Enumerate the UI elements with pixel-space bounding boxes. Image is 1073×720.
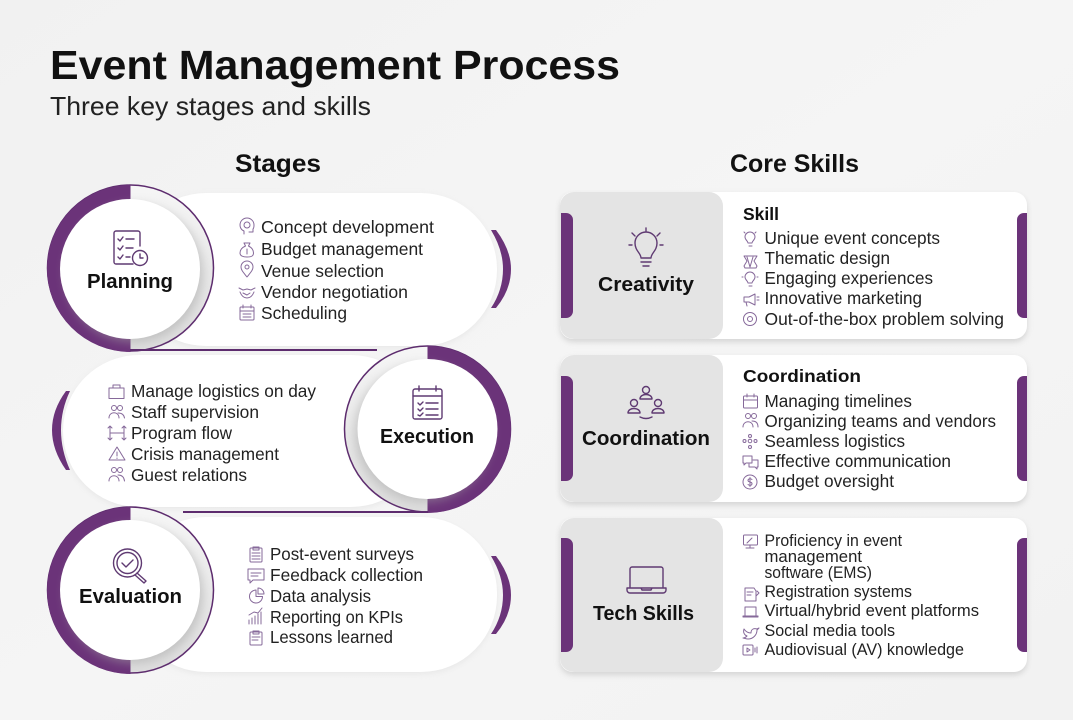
- panel: execution stage: [47, 192, 1027, 675]
- list: execution tasks: Staff supervision: [131, 402, 259, 422]
- list: tech skills items: software (EMS): [764, 564, 872, 582]
- list: evaluation tasks: [248, 544, 423, 647]
- list: planning tasks: Venue selection: [261, 261, 384, 281]
- accent bars: [561, 213, 1027, 318]
- icon: checklist with clock: [114, 231, 148, 266]
- icon: magnifier with check: [114, 549, 146, 583]
- list: evaluation tasks: Post-event surveys: [270, 544, 414, 564]
- list: execution tasks: Crisis management: [131, 444, 279, 464]
- list: execution tasks: [108, 381, 316, 485]
- accent arc: [52, 391, 70, 470]
- list: planning tasks: Budget management: [261, 239, 423, 259]
- label: evaluation: Evaluation: [79, 585, 182, 608]
- list: tech skills items: Social media tools: [764, 622, 895, 640]
- list: evaluation tasks: Lessons learned: [270, 627, 393, 647]
- icon: light bulb: [629, 228, 663, 266]
- title: Event Management Process: [50, 42, 620, 88]
- heading: stages: Stages: [235, 150, 321, 178]
- list: creativity skills: Skill: [743, 204, 779, 224]
- list: planning tasks: Vendor negotiation: [261, 282, 408, 302]
- list: coordination skills: Budget oversight: [764, 471, 894, 491]
- accent arc: [491, 230, 511, 308]
- panel: coordination skill card: [560, 355, 1027, 675]
- accent bars: [561, 538, 1027, 652]
- list: creativity skills: Unique event concepts: [764, 228, 940, 248]
- list: execution tasks: Guest relations: [131, 465, 247, 485]
- list: creativity skills: Thematic design: [764, 248, 890, 268]
- label: coordination: Coordination: [582, 427, 710, 450]
- list: creativity skills: [742, 204, 1004, 329]
- list: planning tasks: Scheduling: [261, 303, 347, 323]
- list: evaluation tasks: Data analysis: [270, 586, 371, 606]
- panel: planning stage: [47, 185, 1027, 675]
- icon: laptop: [627, 567, 666, 593]
- list: creativity skills: Innovative marketing: [764, 288, 922, 308]
- list: tech skills items: Virtual/hybrid event platforms: [764, 602, 979, 620]
- label: execution: Execution: [380, 425, 474, 448]
- icon: team circle: [628, 386, 664, 418]
- list: coordination skills: [743, 366, 996, 491]
- list: execution tasks: Program flow: [131, 423, 232, 443]
- list: creativity skills: Out-of-the-box problem solving: [764, 309, 1004, 329]
- label: creativity: Creativity: [598, 273, 695, 296]
- connector line: [130, 349, 377, 351]
- list: planning tasks: Concept development: [261, 217, 434, 237]
- label: planning: Planning: [87, 270, 173, 293]
- panel: evaluation stage: [47, 192, 1027, 675]
- list: tech skills items: Audiovisual (AV) knowledge: [764, 641, 964, 659]
- list: coordination skills: Organizing teams and vendors: [764, 411, 996, 431]
- list: tech skills items: management: [764, 548, 862, 566]
- list: coordination skills: Seamless logistics: [764, 431, 905, 451]
- list: tech skills items: Proficiency in event: [764, 532, 902, 550]
- accent bars: [561, 376, 1027, 481]
- connector line: [183, 511, 428, 513]
- label: tech skills: Tech Skills: [593, 602, 694, 625]
- list: tech skills items: [743, 532, 979, 659]
- list: coordination skills: Managing timelines: [764, 391, 912, 411]
- list: evaluation tasks: Feedback collection: [270, 565, 423, 585]
- list: coordination skills: Coordination: [743, 366, 861, 386]
- list: evaluation tasks: Reporting on KPIs: [270, 607, 403, 627]
- accent arc: [491, 556, 511, 634]
- list: coordination skills: Effective communication: [764, 451, 951, 471]
- list: execution tasks: Manage logistics on day: [131, 381, 316, 401]
- list: planning tasks: [239, 217, 434, 323]
- list: creativity skills: Engaging experiences: [764, 268, 933, 288]
- list: tech skills items: Registration systems: [764, 583, 912, 601]
- subtitle: Three key stages and skills: [50, 91, 371, 121]
- panel: creativity skill card: [560, 192, 1027, 675]
- panel: tech skills card: [560, 518, 1027, 675]
- icon: calendar checklist: [413, 386, 442, 419]
- heading: core skills: Core Skills: [730, 150, 859, 178]
